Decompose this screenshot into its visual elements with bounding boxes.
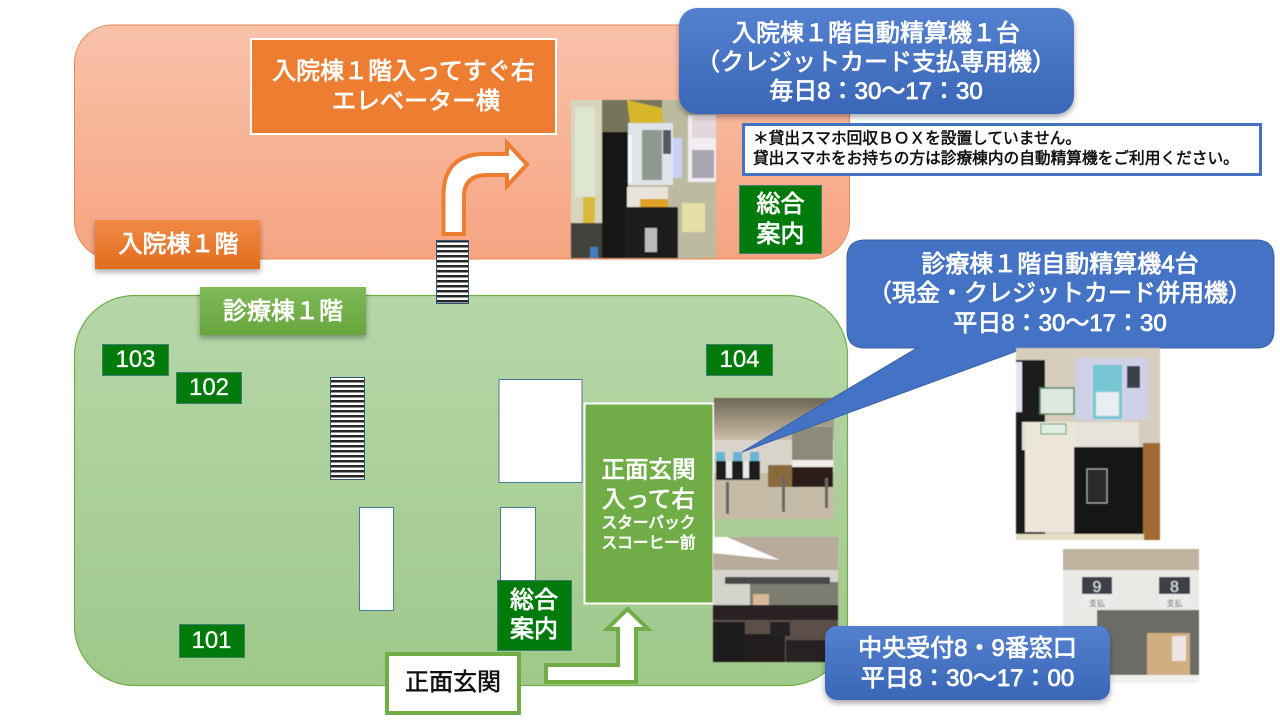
box: right after main entrance, in front of Starbucks bbox=[584, 404, 714, 604]
label: general information, inpatient bbox=[740, 186, 822, 254]
photo: outpatient payment machine bbox=[1016, 348, 1160, 540]
block: white pillar left bbox=[360, 508, 394, 610]
box: right after main entrance, in front of Starbucks: 正面玄関 bbox=[602, 456, 696, 482]
label: general information, inpatient: 総合 bbox=[756, 191, 804, 218]
block: white area upper bbox=[499, 380, 582, 482]
photo: central reception bbox=[713, 537, 838, 662]
room 104: 104 bbox=[719, 346, 760, 373]
panel: inpatient building 1F bbox=[74, 25, 850, 259]
label: outpatient building 1F bbox=[200, 287, 366, 335]
callout: central reception windows 8 and 9: 平日8：30～17：00 bbox=[861, 665, 1074, 692]
callout: outpatient machines hours: 平日8：30～17：30 bbox=[953, 310, 1167, 337]
room 102: 102 bbox=[189, 374, 229, 401]
photo: windows 8 and 9: 支払 bbox=[1166, 598, 1182, 608]
callout: outpatient machines hours bbox=[742, 240, 1274, 452]
label: outpatient building 1F: 診療棟１階 bbox=[223, 298, 343, 325]
label: general information, outpatient bbox=[498, 580, 572, 650]
box: right after main entrance, in front of Starbucks: スコーヒー前 bbox=[601, 534, 696, 552]
icon: stairs between buildings bbox=[436, 240, 468, 304]
room 101: 101 bbox=[191, 627, 232, 654]
photo: outpatient payment area bbox=[714, 398, 834, 519]
callout: central reception windows 8 and 9: 中央受付8・9番窓口 bbox=[858, 635, 1077, 662]
box: right after main entrance, in front of Starbucks: 入って右 bbox=[602, 486, 695, 512]
callout: inpatient machine hours bbox=[679, 8, 1074, 114]
callout: inpatient machine hours: 入院棟１階自動精算機１台 bbox=[732, 20, 1020, 47]
note: rental smartphone return box: 貸出スマホをお持ちの方は診療棟内の自動精算機をご利用ください。 bbox=[753, 148, 1239, 168]
label: general information, outpatient: 総合 bbox=[510, 587, 558, 614]
photo: windows 8 and 9 bbox=[1063, 549, 1199, 683]
photo: inpatient payment machine bbox=[571, 100, 716, 258]
callout: outpatient machines hours: （現金・クレジットカード併用機） bbox=[868, 280, 1252, 307]
icon: stairs in outpatient building bbox=[330, 378, 364, 480]
heading box: right of inpatient entrance, beside elevator: エレベーター横 bbox=[332, 88, 500, 115]
arrow: turn right to inpatient machine bbox=[444, 143, 527, 234]
room 101 bbox=[180, 624, 244, 658]
label: main entrance: 正面玄関 bbox=[405, 669, 501, 696]
callout: outpatient machines hours: 診療棟１階自動精算機4台 bbox=[921, 251, 1199, 278]
label: main entrance bbox=[387, 654, 519, 713]
room 103: 103 bbox=[115, 346, 156, 373]
callout: inpatient machine hours: 毎日8：30～17：30 bbox=[769, 78, 983, 105]
heading box: right of inpatient entrance, beside elevator bbox=[251, 39, 556, 134]
panel: outpatient building 1F bbox=[74, 296, 848, 686]
block: white pillar right bbox=[500, 508, 536, 588]
photo: windows 8 and 9: 8 bbox=[1170, 579, 1179, 596]
room 102 bbox=[176, 372, 242, 404]
callout: central reception windows 8 and 9 bbox=[825, 626, 1110, 700]
label: general information, inpatient: 案内 bbox=[756, 221, 804, 248]
box: right after main entrance, in front of Starbucks: スターバック bbox=[602, 514, 695, 532]
photo: windows 8 and 9: 支払 bbox=[1089, 598, 1105, 608]
label: inpatient building 1F: 入院棟１階 bbox=[118, 231, 238, 258]
room 103 bbox=[102, 344, 168, 376]
heading box: right of inpatient entrance, beside elevator: 入院棟１階入ってすぐ右 bbox=[272, 58, 535, 85]
room 104 bbox=[706, 344, 772, 376]
label: inpatient building 1F bbox=[95, 220, 260, 269]
photo: windows 8 and 9: 9 bbox=[1093, 579, 1102, 596]
arrow: from main entrance to payment area bbox=[546, 609, 648, 682]
note: rental smartphone return box bbox=[744, 124, 1260, 174]
note: rental smartphone return box: ＊貸出スマホ回収ＢＯＸを設置していません。 bbox=[753, 130, 1081, 148]
label: general information, outpatient: 案内 bbox=[510, 616, 558, 643]
callout: inpatient machine hours: （クレジットカード支払専用機） bbox=[696, 49, 1056, 76]
